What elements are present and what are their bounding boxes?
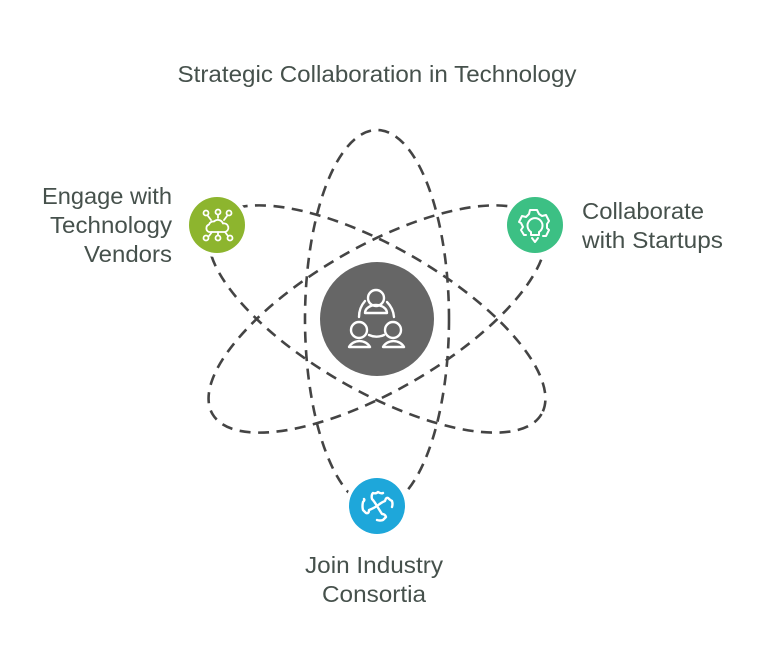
label: Join Industry Consortia: Consortia [322, 581, 426, 607]
label: Engage with Technology Vendors: Vendors [84, 241, 172, 267]
label: Collaborate with Startups [581, 198, 723, 253]
label: Collaborate with Startups: with Startups [581, 227, 723, 253]
node: industry consortia icon [345, 474, 409, 538]
label: Engage with Technology Vendors: Engage with [42, 183, 172, 209]
node: technology vendors icon [185, 193, 249, 257]
label: Collaborate with Startups: Collaborate [582, 198, 704, 224]
central node: collaboration icon [317, 259, 437, 379]
label: Engage with Technology Vendors [42, 183, 173, 267]
label: Join Industry Consortia [305, 552, 444, 607]
node: startups icon [503, 193, 567, 257]
title: Strategic Collaboration in Technology [178, 61, 577, 87]
label: Engage with Technology Vendors: Technology [50, 212, 173, 238]
orbit ellipses [176, 130, 578, 508]
label: Join Industry Consortia: Join Industry [305, 552, 444, 578]
